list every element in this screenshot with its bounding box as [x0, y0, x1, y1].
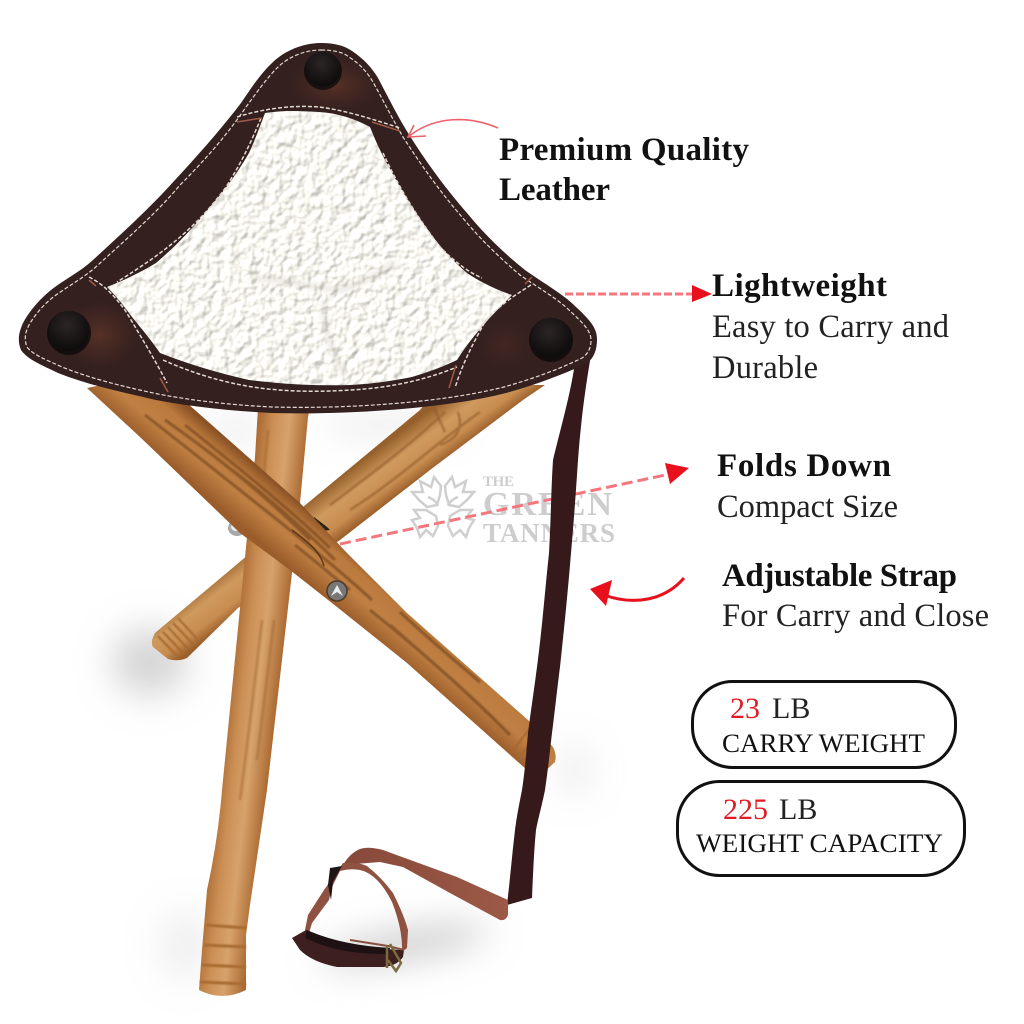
badge: weight capacity: [678, 782, 964, 876]
corner rust mottling: [287, 57, 383, 113]
cap: right: [529, 318, 573, 362]
watermark wordmark: [483, 474, 615, 548]
label: lightweight: Durable: [712, 350, 818, 386]
brown strap run: [343, 848, 508, 920]
small bolts behind the legs: [228, 517, 330, 536]
label: lightweight: Easy to Carry and: [712, 309, 949, 345]
strap tail with buckle: [292, 930, 404, 967]
seat outline: [19, 43, 597, 413]
outer stitching: [25, 50, 591, 407]
leather seat: [19, 43, 597, 413]
label: adjustable strap: For Carry and Close: [722, 598, 989, 634]
watermark leaf emblem: [412, 477, 474, 537]
label: premium quality leather: Premium Quality: [499, 132, 750, 168]
label: folds down: Folds Down: [717, 448, 891, 484]
cap: top: [304, 52, 342, 90]
watermark: [412, 474, 615, 548]
arrow: leather: [408, 120, 498, 137]
label: folds down: [717, 448, 898, 525]
back wooden leg: [152, 385, 545, 660]
floor shadows: [112, 416, 589, 981]
cap: left: [47, 311, 91, 355]
label: lightweight: Lightweight: [712, 268, 887, 304]
vertical strap band: [507, 355, 591, 905]
arrow: lightweight: [565, 285, 712, 302]
badge: carry weight: LB: [772, 692, 810, 725]
badge: carry weight: CARRY WEIGHT: [722, 729, 925, 758]
watermark wordmark: THE: [483, 474, 514, 490]
badge: weight capacity: WEIGHT CAPACITY: [696, 829, 943, 858]
watermark wordmark: GREEN: [483, 486, 612, 523]
label: folds down: Compact Size: [717, 489, 898, 525]
fleece panel: [100, 105, 520, 390]
leather strap: [292, 355, 591, 971]
label: premium quality leather: [499, 132, 750, 208]
label: premium quality leather: Leather: [499, 172, 610, 208]
arrow: adjustable strap: [590, 578, 684, 606]
arrow: folds down: [340, 463, 689, 544]
label: adjustable strap: Adjustable Strap: [722, 558, 957, 594]
strap loop: [305, 863, 408, 952]
badge: carry weight: [692, 682, 956, 768]
diagonal wooden leg: [87, 375, 556, 774]
watermark wordmark: TANNERS: [483, 518, 615, 548]
label: lightweight: [712, 268, 949, 386]
badge: carry weight: 23: [730, 692, 760, 725]
badge: weight capacity: 225: [723, 793, 768, 826]
panel stitching: [89, 106, 531, 391]
label: adjustable strap: [722, 558, 989, 634]
front wooden leg: [199, 408, 310, 996]
silver bolt: [327, 581, 347, 601]
badge: weight capacity: LB: [779, 793, 817, 826]
